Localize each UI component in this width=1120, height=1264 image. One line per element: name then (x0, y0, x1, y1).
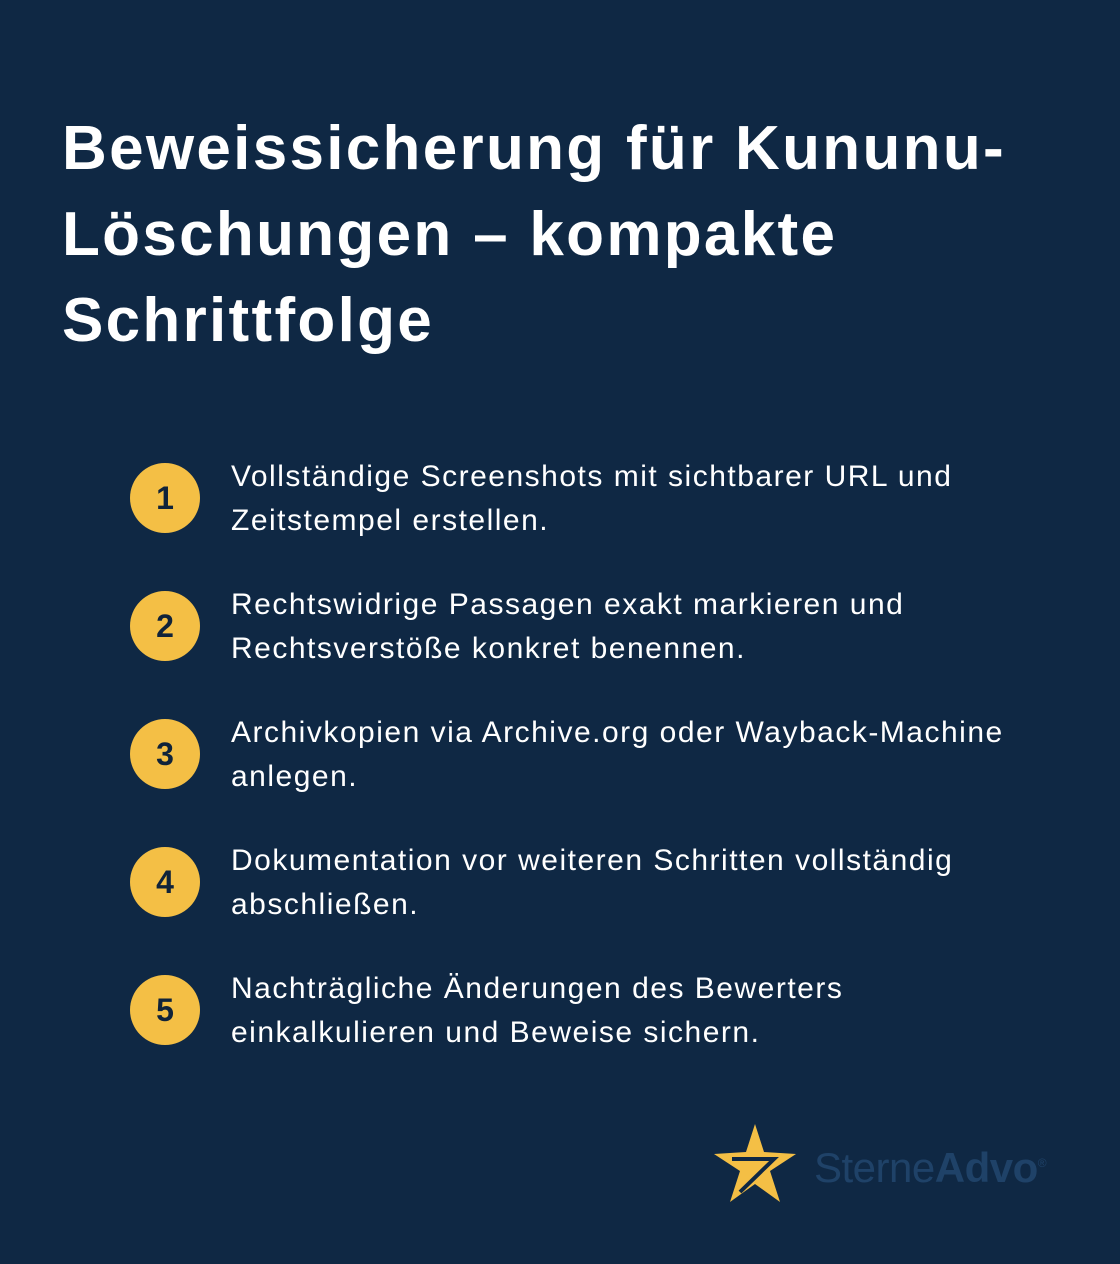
text 1: Vollständige Screenshots mit sichtbarer URL und (231, 460, 952, 493)
number 1 (130, 463, 200, 533)
number 2 (130, 591, 200, 661)
number 1: 1 (156, 480, 174, 516)
number 4: 4 (156, 864, 174, 900)
step 3 (130, 716, 1004, 793)
number 3 (130, 719, 200, 789)
text 2: Rechtswidrige Passagen exakt markieren und (231, 588, 904, 621)
text 5: einkalkulieren und Beweise sichern. (231, 1016, 760, 1049)
text 4: abschließen. (231, 888, 419, 921)
number 5: 5 (156, 992, 174, 1028)
text 1 (231, 460, 952, 537)
number 4 (130, 847, 200, 917)
text 3 (231, 716, 1004, 793)
text 5: Nachträgliche Änderungen des Bewerters (231, 972, 843, 1005)
step 2 (130, 588, 904, 665)
text 3: anlegen. (231, 760, 358, 793)
title: Schrittfolge (62, 286, 434, 355)
title: Beweissicherung für Kununu- (62, 114, 1006, 183)
text 3: Archivkopien via Archive.org oder Wayback-Machine (231, 716, 1004, 749)
number 3: 3 (156, 736, 174, 772)
title: Löschungen – kompakte (62, 200, 837, 269)
logo text: SterneAdvo® (814, 1144, 1046, 1191)
icon: star (714, 1124, 796, 1202)
text 2: Rechtsverstöße konkret benennen. (231, 632, 746, 665)
step 4 (130, 844, 953, 921)
text 4 (231, 844, 953, 921)
number 5 (130, 975, 200, 1045)
title (62, 114, 1006, 355)
text 5 (231, 972, 843, 1049)
text 2 (231, 588, 904, 665)
text 1: Zeitstempel erstellen. (231, 504, 549, 537)
logo (714, 1124, 1046, 1202)
step 1 (130, 460, 952, 537)
step 5 (130, 972, 843, 1049)
number 2: 2 (156, 608, 174, 644)
text 4: Dokumentation vor weiteren Schritten vollständig (231, 844, 953, 877)
